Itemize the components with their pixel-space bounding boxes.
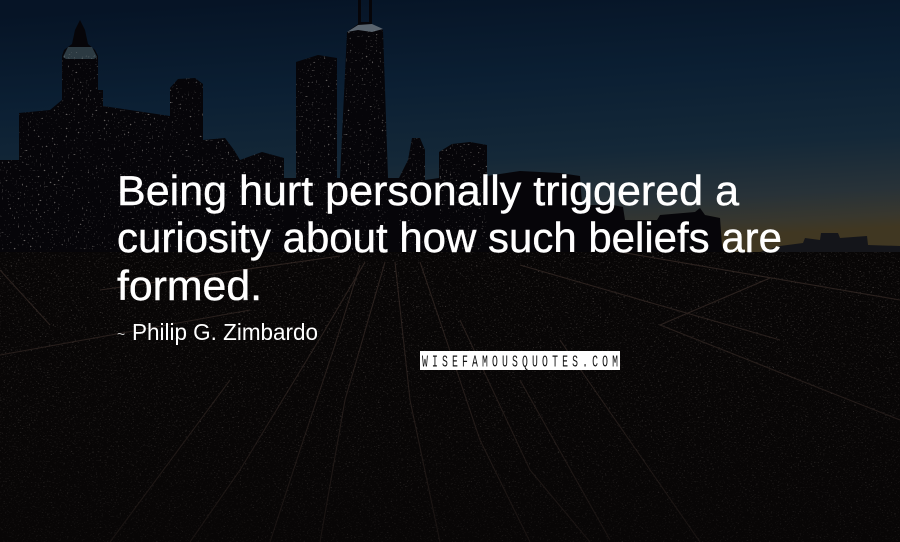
city skyline — [0, 0, 900, 252]
dark city ground — [0, 252, 900, 542]
author attribution — [117, 319, 318, 345]
building window lights — [0, 30, 500, 252]
watermark badge: WISEFAMOUSQUOTES.COM — [422, 354, 618, 373]
distant skyline on the right — [760, 233, 900, 252]
quote line 1: Being hurt personally triggered a — [117, 167, 740, 214]
night sky background — [0, 0, 900, 252]
gap filler between towers — [284, 178, 404, 252]
Hancock tower with antennas — [340, 0, 388, 252]
small rounded tower — [399, 138, 425, 252]
twin central tower — [296, 55, 337, 252]
quote line 3: formed. — [117, 262, 262, 309]
perspective street lines — [0, 252, 900, 542]
quote line 2: curiosity about how such beliefs are — [117, 214, 782, 261]
darkening overlay — [0, 252, 900, 542]
tilde: ~ — [117, 326, 125, 342]
building highlights — [63, 24, 383, 59]
left tower with spire — [62, 20, 103, 112]
city light speckle — [0, 252, 900, 542]
mid-rise cluster — [425, 142, 725, 252]
low block on the left — [0, 78, 284, 252]
quote text — [117, 167, 782, 309]
author name: Philip G. Zimbardo — [132, 319, 318, 345]
